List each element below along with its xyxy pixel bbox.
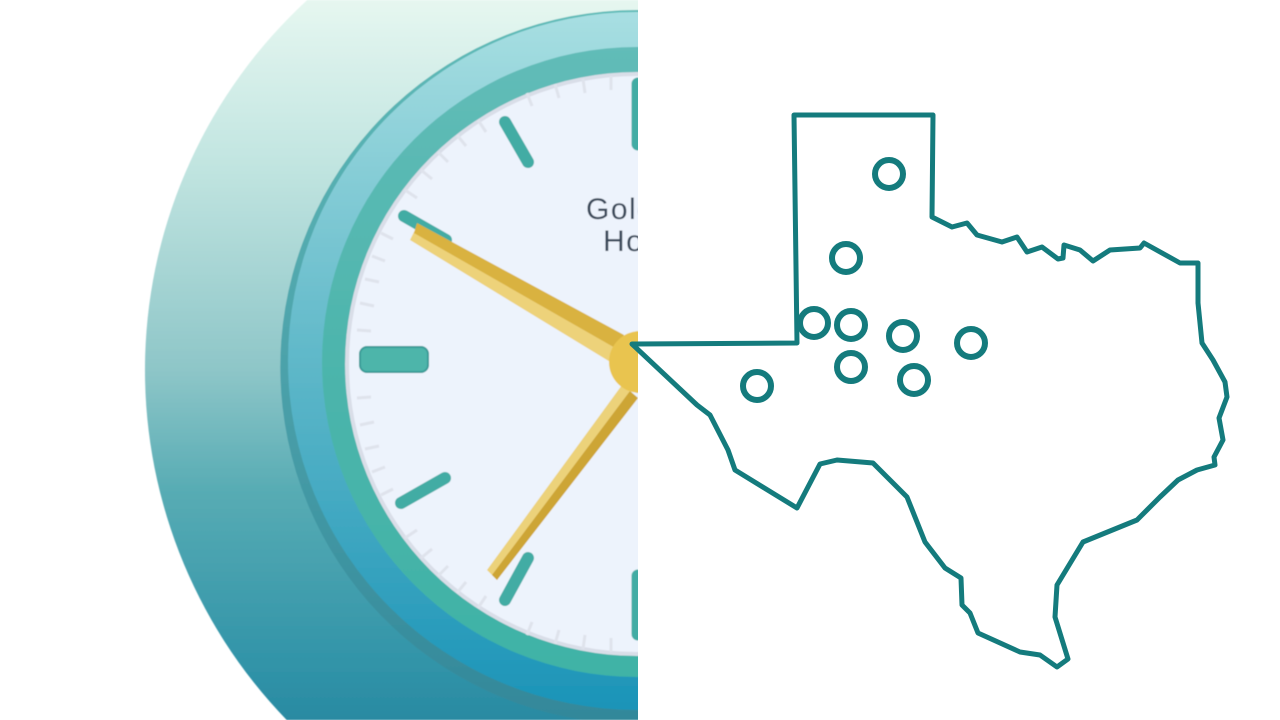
hour marker: 9 o'clock xyxy=(360,347,428,372)
ring shadow xyxy=(280,10,640,720)
hub xyxy=(608,330,638,394)
second hand xyxy=(487,385,638,580)
inner ring xyxy=(322,46,638,678)
clock text xyxy=(587,196,638,252)
minute ticks xyxy=(357,76,611,652)
minute hand xyxy=(410,223,625,363)
outer ring xyxy=(288,11,638,710)
clock: left half xyxy=(144,0,638,720)
clock text: Hour xyxy=(603,225,674,258)
city markers xyxy=(743,160,985,400)
clock text: Golden xyxy=(586,193,692,226)
texas outline xyxy=(632,115,1227,667)
outer clock body xyxy=(145,0,640,720)
clock face xyxy=(344,71,638,657)
hour markers xyxy=(401,84,638,634)
